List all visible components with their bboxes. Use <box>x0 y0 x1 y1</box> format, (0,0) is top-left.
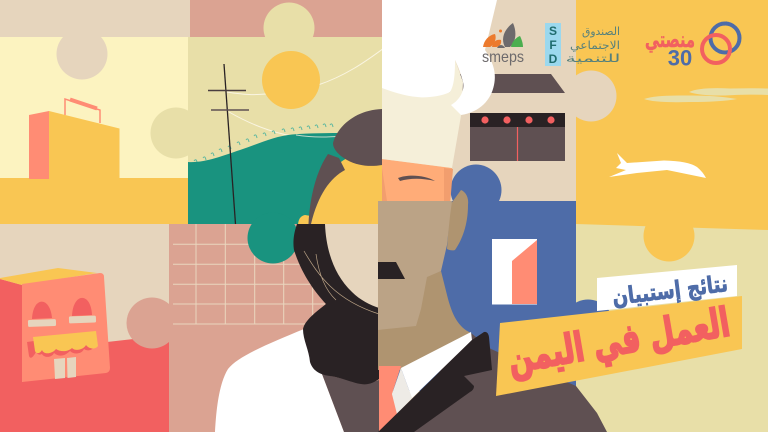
logo: SFD: S <box>549 24 557 38</box>
panel: suitcase <box>0 0 190 224</box>
logo: SFD: F <box>549 38 557 52</box>
logo: Minassati 30: منصتي <box>645 28 695 53</box>
logo: SFD: D <box>549 52 558 66</box>
logo: Minassati 30 <box>645 22 740 70</box>
title: yellow banner with red headline <box>496 296 742 396</box>
panel: chef man portrait <box>378 0 607 432</box>
panel: woman portrait <box>169 109 382 432</box>
icon: door in blue wall <box>492 239 537 304</box>
logo: Minassati 30: 30 <box>668 46 692 70</box>
logo: smeps <box>482 23 524 66</box>
icon: airplane <box>609 153 706 178</box>
logo: smeps: smeps <box>482 49 524 66</box>
panel: beige building backdrop <box>382 0 616 391</box>
logo: SFD <box>545 23 620 66</box>
panel: landscape with pole <box>150 0 384 224</box>
logo: SFD: للتنمية <box>566 52 620 65</box>
title: white banner with blue subtitle: نتائج إستبيان <box>611 271 729 311</box>
logo: SFD: الاجتماعي <box>570 39 620 52</box>
panel: yellow sky <box>576 0 768 432</box>
panel: building with awning <box>0 224 178 432</box>
logo: SFD: الصندوق <box>582 25 620 38</box>
